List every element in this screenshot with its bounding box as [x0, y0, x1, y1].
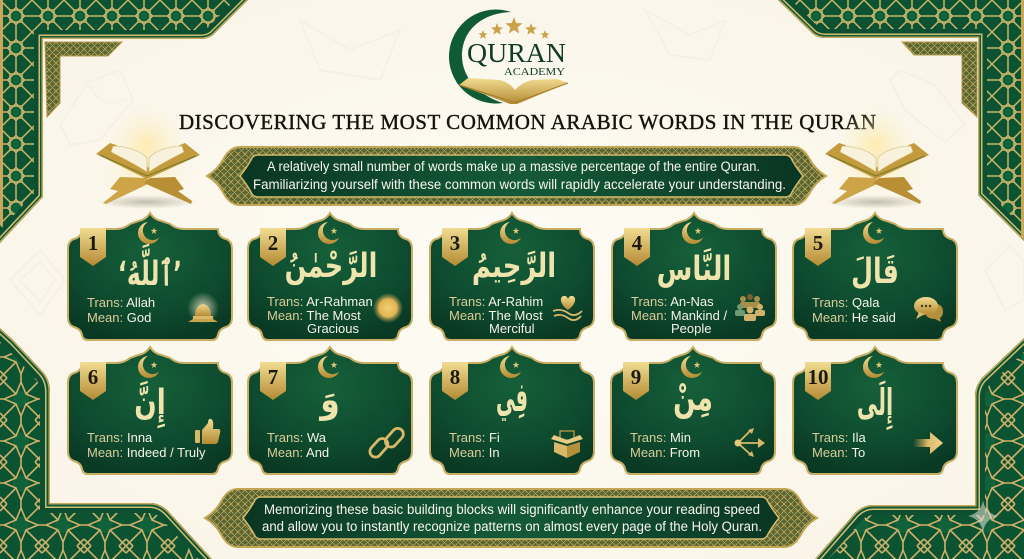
transliteration and meaning: Merciful — [489, 321, 535, 336]
arabic word: ‘ٱللَّهُ’ — [118, 243, 182, 293]
badge 8: 8 — [450, 365, 460, 389]
card 4: An-Nas — [612, 213, 776, 340]
badge 3: 3 — [450, 231, 460, 255]
badge 9: 9 — [631, 365, 641, 389]
transliteration and meaning: Trans: Fi — [449, 430, 500, 445]
transliteration and meaning: And — [306, 445, 329, 460]
card 10: Ila — [793, 347, 957, 474]
icon: chain link — [368, 426, 406, 459]
faint background ornaments — [10, 10, 1024, 315]
arabic word: مِنْ — [673, 375, 713, 419]
arabic word: إِنَّ — [134, 379, 166, 429]
transliteration and meaning: Trans: Qala — [812, 295, 879, 310]
badge 1: 1 — [88, 231, 98, 255]
transliteration and meaning: Trans: An-Nas — [631, 294, 714, 309]
logo: Quran Academy — [449, 10, 568, 104]
logo crescent — [449, 10, 511, 104]
icon: right arrow — [913, 432, 943, 454]
transliteration and meaning: Trans: Min — [630, 430, 691, 445]
badge 9 — [623, 362, 649, 400]
transliteration and meaning: People — [671, 321, 711, 336]
arabic word: الرَّحْمٰنُ — [285, 246, 377, 285]
transliteration and meaning: Trans: Allah — [87, 295, 155, 310]
icon: open box — [551, 431, 583, 458]
badge 7 — [260, 362, 286, 400]
transliteration and meaning: The Most — [489, 308, 543, 323]
transliteration and meaning: God — [127, 310, 151, 325]
badge 10: 10 — [808, 365, 828, 389]
arabic word: إِلَى — [857, 380, 893, 431]
transliteration and meaning: Mean: — [267, 445, 303, 460]
transliteration and meaning: Mean: — [630, 445, 666, 460]
icon: heart and waves — [553, 296, 582, 320]
transliteration and meaning: Indeed / Truly — [127, 445, 206, 460]
card 5: Qala — [793, 213, 957, 340]
crescent — [863, 356, 884, 378]
transliteration and meaning: From — [670, 445, 700, 460]
badge 6 — [80, 362, 106, 400]
title: DISCOVERING THE MOST COMMON ARABIC WORDS IN THE QURAN — [179, 110, 876, 134]
crescent — [681, 356, 702, 378]
card 9: Min — [611, 347, 775, 474]
badge 1 — [80, 228, 106, 266]
transliteration and meaning: Mean: — [87, 310, 123, 325]
transliteration and meaning: The Most — [307, 308, 361, 323]
logo wordmark QURAN: QURAN — [467, 38, 566, 68]
icon: group of people — [735, 294, 765, 321]
badge 7: 7 — [268, 365, 278, 389]
corner frame: top left — [0, 0, 250, 260]
crescent — [138, 222, 159, 244]
badge 2: 2 — [268, 231, 278, 255]
transliteration and meaning: Mean: — [449, 308, 485, 323]
top banner — [207, 147, 826, 205]
arabic word: النَّاس — [657, 247, 731, 289]
crescent — [500, 222, 521, 244]
transliteration and meaning: Trans: Ar-Rahman — [267, 294, 373, 309]
transliteration and meaning: Mean: — [267, 308, 303, 323]
transliteration and meaning: Trans: Ila — [812, 430, 866, 445]
corner frame: bottom left — [0, 328, 212, 559]
transliteration and meaning: Trans: Ar-Rahim — [449, 294, 543, 309]
bottom banner text: and allow you to instantly recognize patterns on almost every page of the Holy Quran. — [262, 519, 762, 534]
transliteration and meaning: He said — [852, 310, 896, 325]
corner frame: bottom right — [815, 338, 1024, 559]
top banner text: Familiarizing yourself with these common words will rapidly accelerate your understanding. — [253, 177, 786, 192]
crescent — [318, 222, 339, 244]
crescent — [138, 356, 159, 378]
transliteration and meaning: Mean: — [449, 445, 485, 460]
corner frame: top right — [775, 0, 1024, 260]
badge 10 — [805, 362, 831, 400]
badge 5: 5 — [813, 231, 823, 255]
bottom banner text: Memorizing these basic building blocks will significantly enhance your reading speed — [264, 502, 760, 517]
transliteration and meaning: To — [852, 445, 865, 460]
icon: mosque dome — [187, 292, 219, 324]
crescent — [682, 222, 703, 244]
badge 6: 6 — [88, 365, 98, 389]
transliteration and meaning: In — [489, 445, 500, 460]
transliteration and meaning: Mean: — [87, 445, 123, 460]
arabic word: الرَّحِيمُ — [472, 247, 556, 286]
card 8: Fi — [430, 347, 594, 474]
crescent — [863, 222, 884, 244]
card 2: Ar-Rahman — [248, 213, 412, 340]
badge 5 — [805, 228, 831, 266]
transliteration and meaning: Mean: — [631, 308, 667, 323]
icon: sun — [373, 293, 403, 323]
card 3: Ar-Rahim — [430, 213, 594, 340]
crescent — [318, 356, 339, 378]
bottom banner text — [262, 502, 762, 534]
badge 3 — [442, 228, 468, 266]
transliteration and meaning: Mean: — [812, 445, 848, 460]
icon: speech bubbles — [914, 297, 943, 322]
arabic word: قَالَ — [851, 252, 899, 292]
logo wordmark ACADEMY: ACADEMY — [504, 66, 565, 78]
transliteration and meaning: Trans: Inna — [87, 430, 152, 445]
crescent — [500, 356, 521, 378]
badge 4: 4 — [632, 231, 643, 255]
transliteration and meaning: Mankind / — [671, 308, 727, 323]
badge 4 — [624, 228, 650, 266]
icon: branching arrows — [734, 428, 765, 457]
bottom banner — [205, 489, 817, 547]
icon: left Quran on stand — [95, 107, 200, 209]
card 6: Inna — [68, 347, 232, 474]
transliteration and meaning: Gracious — [307, 321, 360, 336]
logo open book — [459, 78, 568, 104]
logo stars — [478, 17, 550, 39]
arabic word: وَ — [318, 379, 340, 422]
top banner text: A relatively small number of words make up a massive percentage of the entire Quran. — [267, 159, 760, 174]
icon: right Quran on stand — [824, 107, 929, 209]
badge 2 — [260, 228, 286, 266]
badge 8 — [442, 362, 468, 400]
arabic word: فِي — [496, 375, 528, 421]
card 1: Allah — [68, 213, 232, 340]
sparkle watermark — [968, 500, 998, 532]
transliteration and meaning: Trans: Wa — [267, 430, 326, 445]
icon: thumbs up — [195, 419, 220, 444]
transliteration and meaning: Mean: — [812, 310, 848, 325]
card 7: Wa — [248, 347, 412, 474]
top banner text — [253, 159, 786, 192]
